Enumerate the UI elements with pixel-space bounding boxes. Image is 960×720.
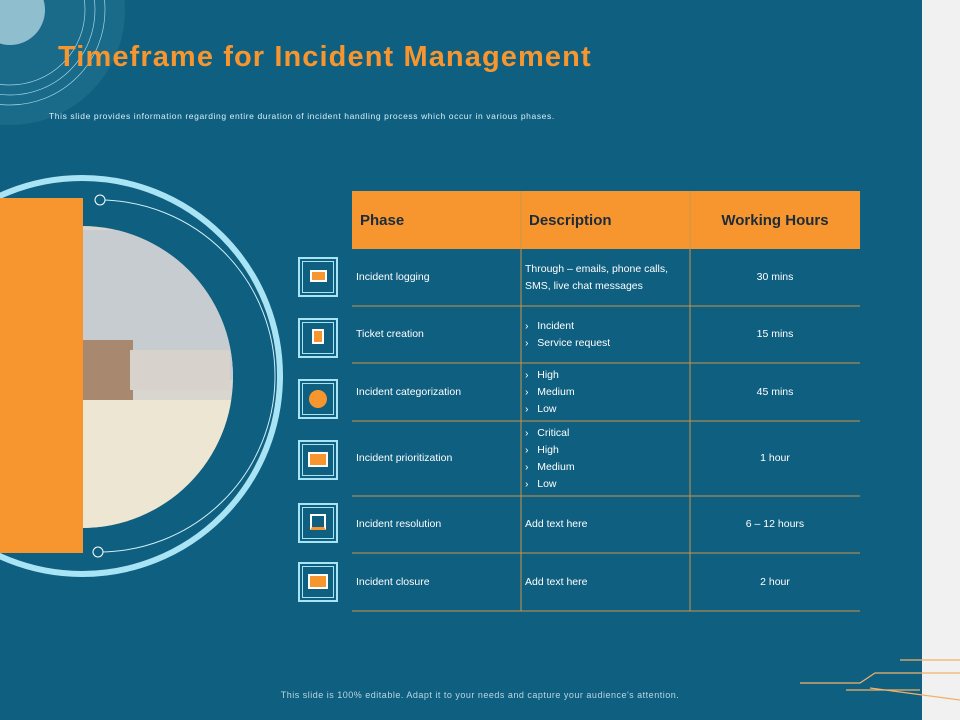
text: Ticket creation [356, 328, 424, 340]
rows: Incident logging [356, 271, 430, 283]
text: Incident resolution [356, 518, 441, 530]
text: 2 hour [760, 576, 790, 588]
text: Incident closure [356, 576, 430, 588]
text: Incident prioritization [356, 452, 452, 464]
text: › Critical [525, 426, 569, 438]
text: Phase [360, 212, 404, 228]
text: › High [525, 368, 559, 380]
text: Incident categorization [356, 386, 461, 398]
text: › High [525, 444, 559, 456]
text: Add text here [525, 518, 587, 530]
icons [298, 257, 338, 297]
text: › Low [525, 478, 557, 490]
text: 6 – 12 hours [746, 518, 804, 530]
text: 15 mins [757, 328, 793, 340]
text: › Medium [525, 460, 575, 472]
subtitle: This slide provides information regarding entire duration of incident handling process which occur in various phases. [49, 111, 555, 121]
text: Working Hours [721, 212, 829, 228]
text: Through – emails, phone calls, SMS, live chat messages [525, 262, 668, 292]
text: › Service request [525, 336, 610, 348]
text: › Medium [525, 386, 575, 398]
table header [352, 191, 860, 249]
left circle graphic [0, 175, 283, 577]
decorative top-left circles [0, 0, 125, 125]
text: › Low [525, 402, 557, 414]
title: Timeframe for Incident Management [58, 41, 592, 73]
right grey strip [922, 0, 960, 720]
footer: This slide is 100% editable. Adapt it to your needs and capture your audience's attention. [281, 690, 679, 700]
text: 30 mins [757, 271, 793, 283]
text: Description [529, 212, 612, 228]
text: › Incident [525, 320, 574, 332]
text: 45 mins [757, 386, 793, 398]
text: 1 hour [760, 452, 790, 464]
text: Add text here [525, 576, 587, 588]
